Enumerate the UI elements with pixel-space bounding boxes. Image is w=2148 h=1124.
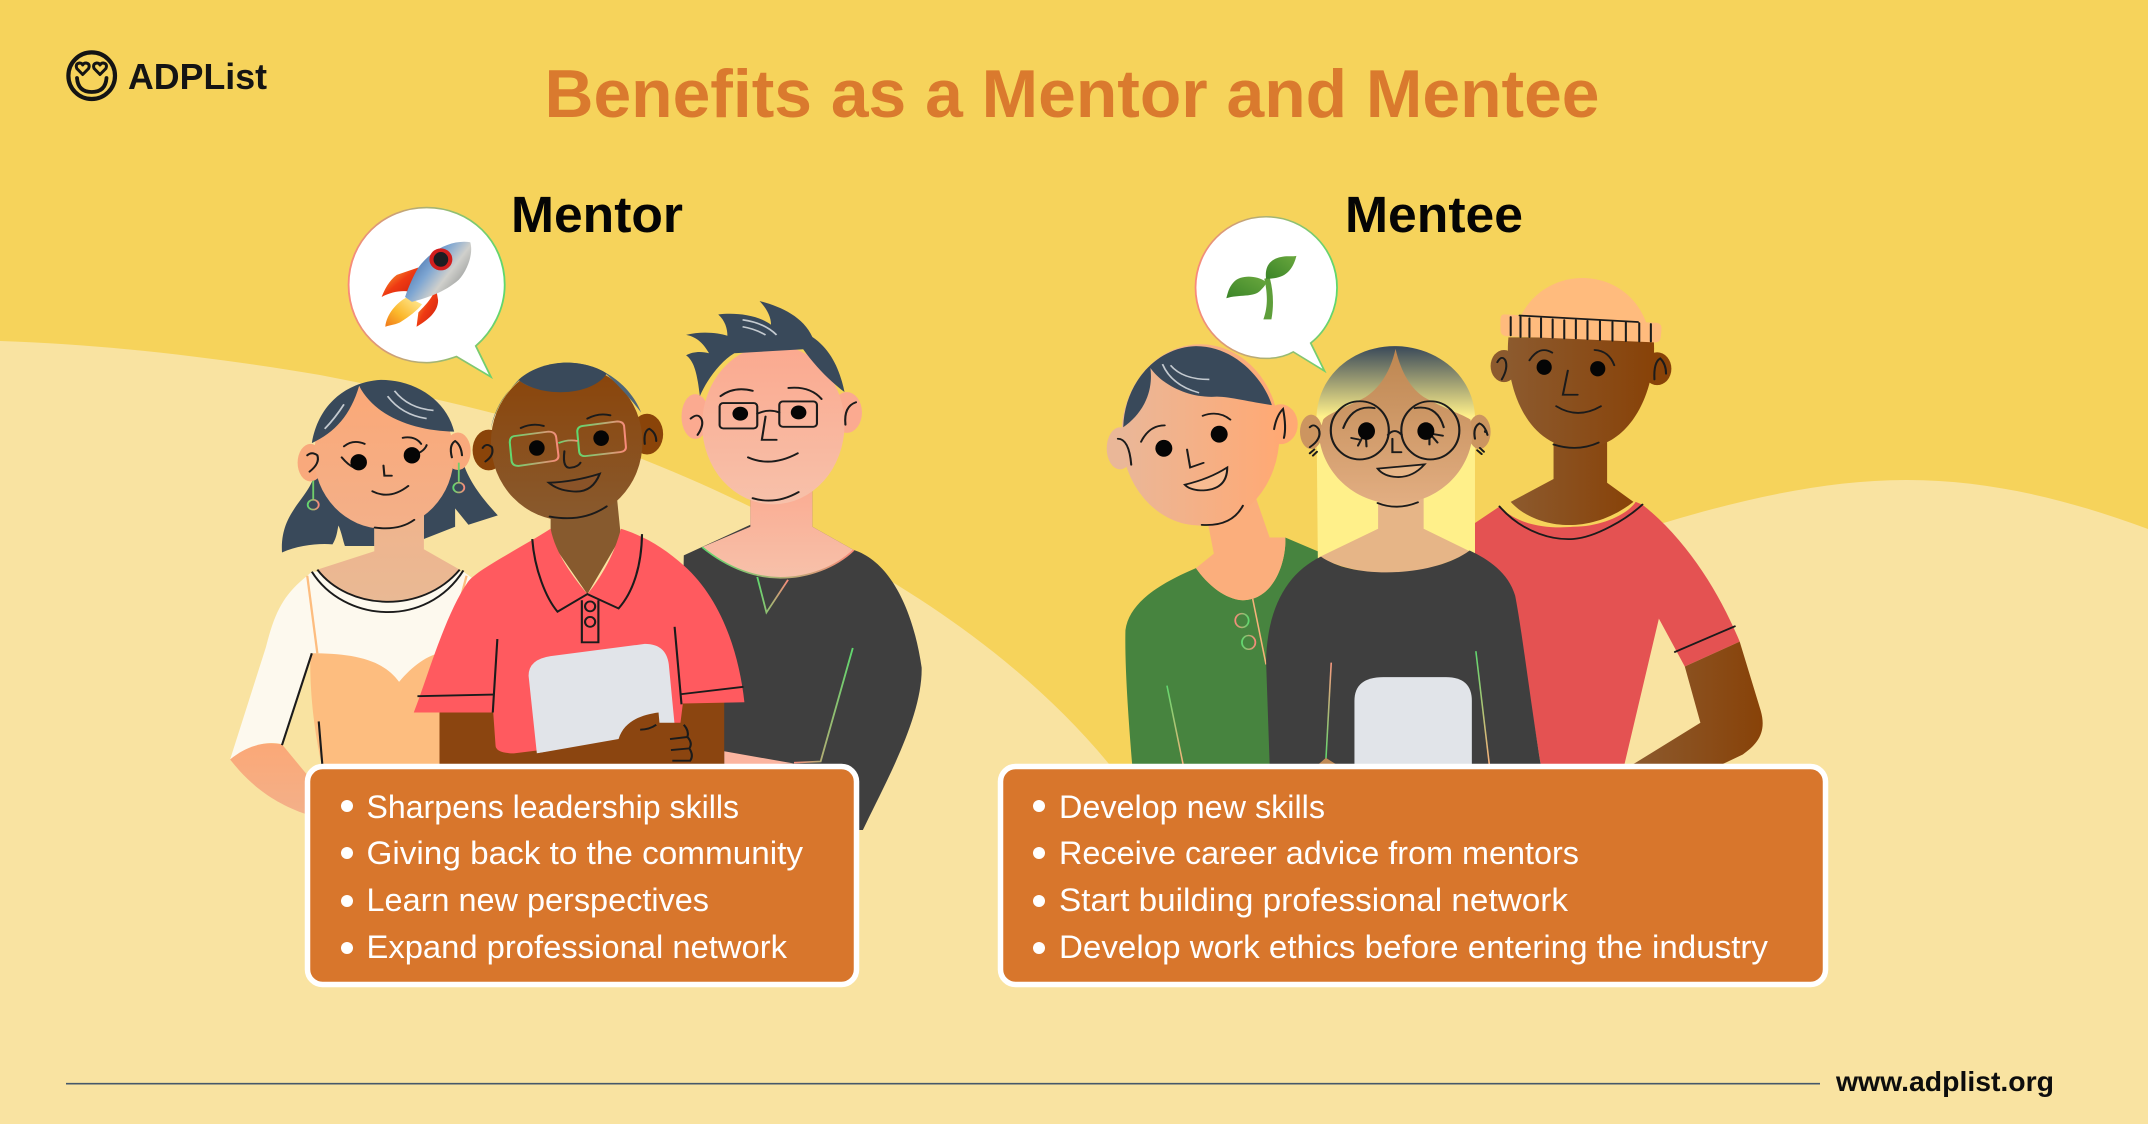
bullet list: mentor: Expand professional network bbox=[366, 929, 788, 965]
person: boy with green shirt bbox=[1107, 344, 1323, 764]
bullet list: mentee: Develop new skills bbox=[1059, 789, 1325, 825]
bullet list: mentee: Start building professional network bbox=[1059, 882, 1569, 918]
bullet list: mentor bbox=[341, 789, 803, 965]
logo wordmark: ADPList bbox=[128, 56, 267, 97]
illustration: mentee group bbox=[1107, 217, 1763, 764]
background: left hill bbox=[0, 341, 1109, 1124]
bullet list: mentor: Learn new perspectives bbox=[366, 882, 709, 918]
panel: mentor benefits bbox=[308, 766, 856, 984]
background: bottom band bbox=[1100, 764, 1500, 1124]
heading: Mentor: Mentor bbox=[511, 186, 683, 243]
logo: ADPList bbox=[68, 52, 267, 99]
footer url: www.adplist.org bbox=[1835, 1066, 2054, 1097]
person: girl with blonde hair and glasses bbox=[1266, 346, 1541, 764]
speech bubble: seedling bbox=[1196, 217, 1337, 371]
background: right hill bbox=[1400, 480, 2148, 1124]
bullet list: mentee: Receive career advice from mentors bbox=[1059, 835, 1579, 871]
person: man with beanie and red shirt bbox=[1475, 278, 1763, 764]
bullet list: mentor: Giving back to the community bbox=[366, 835, 803, 871]
panel: mentee benefits bbox=[1000, 766, 1826, 984]
person: man with black shirt bbox=[679, 301, 922, 830]
speech bubble: rocket bbox=[349, 208, 505, 377]
icon: seedling bbox=[1226, 256, 1296, 319]
illustration: mentor group bbox=[230, 208, 922, 830]
person: woman with white top bbox=[230, 380, 498, 815]
bullet list: mentee: Develop work ethics before entering the industry bbox=[1059, 929, 1768, 965]
bullet list: mentee bbox=[1033, 789, 1768, 965]
title: Benefits as a Mentor and Mentee bbox=[544, 56, 1600, 132]
person: man with red polo bbox=[414, 363, 744, 766]
icon: smiley with heart eyes bbox=[68, 52, 115, 99]
bullet list: mentor: Sharpens leadership skills bbox=[366, 789, 739, 825]
heading: Mentee: Mentee bbox=[1345, 186, 1523, 243]
icon: rocket bbox=[382, 242, 471, 327]
